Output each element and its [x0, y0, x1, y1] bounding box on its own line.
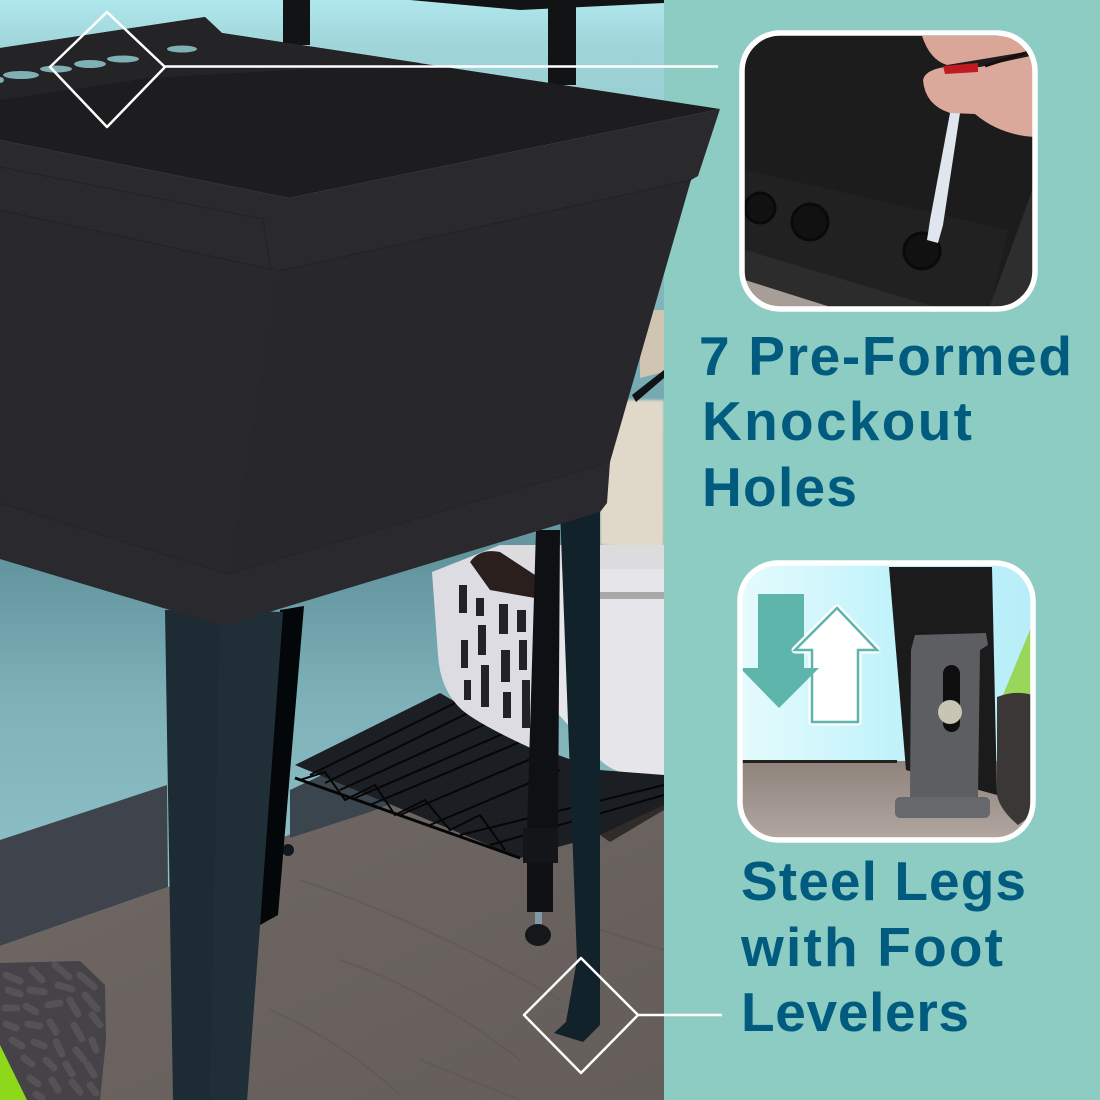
screw holes [745, 193, 940, 269]
photo background [0, 0, 664, 1100]
rear left leg [260, 606, 304, 925]
side wall [990, 191, 1032, 306]
laundry basket [432, 545, 535, 750]
inset photo: knockout hole [740, 30, 1040, 312]
interior basin [0, 17, 720, 198]
heading: knockout holes: 7 Pre-Formed [699, 325, 1072, 387]
heading: knockout holes: Holes [702, 456, 857, 518]
teal side panel [664, 0, 1100, 1100]
heading: knockout holes: Knockout [702, 390, 972, 452]
hand [922, 36, 1035, 65]
heading: steel legs: Steel Legs [741, 850, 1026, 912]
bucket [500, 545, 664, 775]
screwdriver [927, 113, 960, 243]
towels on shelf [600, 400, 664, 555]
front left leg [165, 610, 283, 1100]
inset frame [742, 33, 1035, 309]
upper shelf [283, 0, 664, 402]
callout marker: knockout holes [50, 12, 718, 127]
inset frame [740, 563, 1033, 840]
heading: knockout holes [699, 325, 1072, 518]
leg [889, 567, 997, 795]
knockout holes [0, 46, 197, 83]
down arrow head [740, 668, 819, 708]
callout marker: foot leveler [524, 958, 722, 1073]
floor [0, 790, 664, 1100]
cloth [997, 693, 1032, 825]
heading: steel legs: Levelers [741, 981, 969, 1043]
sink legs [165, 510, 600, 1100]
wire shelf [295, 693, 664, 858]
front rim [0, 109, 720, 271]
tub body [0, 180, 691, 574]
down arrow shaft [758, 594, 804, 670]
up arrow [795, 608, 877, 722]
slot and screw [943, 665, 960, 732]
chenille mop in corner [0, 961, 106, 1100]
black utility sink tub [0, 17, 720, 626]
heading: steel legs: with Foot [740, 916, 1003, 978]
inset photo: foot leveler [737, 560, 1037, 843]
bracket [910, 633, 988, 798]
lower band [0, 462, 610, 626]
green plant [1003, 625, 1032, 695]
heading: steel legs [740, 850, 1026, 1043]
floor wood grain [270, 880, 664, 1100]
baseboard [0, 785, 168, 946]
shelf post [282, 530, 560, 946]
back right leg [554, 510, 600, 1042]
